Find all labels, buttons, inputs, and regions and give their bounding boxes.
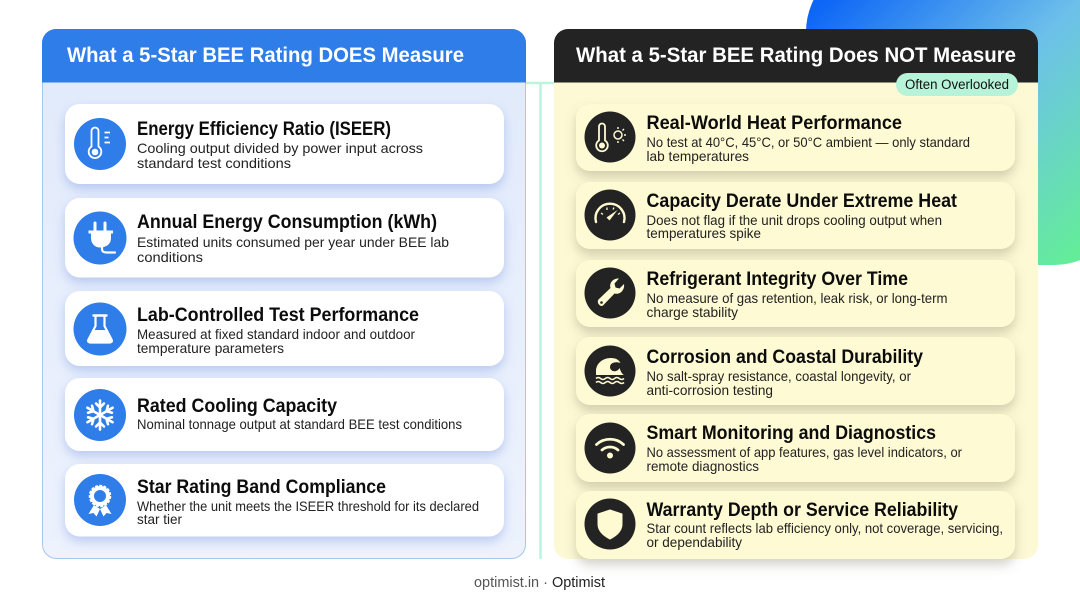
decorative gradient blob [806,0,1080,265]
card: warranty depth or service reliability [576,491,1015,559]
icon: wifi signal [584,422,636,474]
description: charge stability [646,305,738,320]
description: No salt-spray resistance, coastal longevity, or [646,369,911,384]
description: standard test conditions [137,156,291,171]
description: conditions [137,250,203,265]
icon: thermometer and sun [584,112,636,162]
description: temperatures spike [646,226,761,241]
icon: award rosette [74,474,126,526]
footer source line: optimist.in · Optimist [474,575,605,591]
description: No test at 40°C, 45°C, or 50°C ambient — only standard [646,135,970,150]
description: No assessment of app features, gas level indicators, or [646,445,962,460]
card: capacity derate under extreme heat [576,182,1015,249]
description [137,235,449,265]
icon: flask [74,302,126,356]
badge: often overlooked: Often Overlooked [905,77,1009,92]
panel header [554,29,1038,82]
description [137,327,415,356]
title: Energy Efficiency Ratio (ISEER) [137,118,391,140]
description [646,445,962,474]
panel header: What a 5-Star BEE Rating Does NOT Measure [576,43,1016,67]
connector line between panels [526,83,554,559]
description: star tier [137,512,182,527]
title: Star Rating Band Compliance [137,476,386,498]
description: temperature parameters [137,341,284,356]
title: Warranty Depth or Service Reliability [646,499,958,521]
description: Measured at fixed standard indoor and outdoor [137,327,415,342]
card: energy efficiency ratio [65,104,504,184]
title: Refrigerant Integrity Over Time [646,268,908,290]
title: Corrosion and Coastal Durability [646,346,923,368]
icon: shield [584,498,636,550]
description [646,213,942,241]
description: Cooling output divided by power input across [137,141,423,156]
description: or dependability [646,535,742,550]
description: remote diagnostics [646,459,759,474]
card: refrigerant integrity over time [576,260,1015,327]
title: Real-World Heat Performance [646,112,902,134]
title: Smart Monitoring and Diagnostics [646,422,936,444]
description: Estimated units consumed per year under BEE lab [137,235,449,250]
description [646,369,911,398]
description: lab temperatures [646,149,749,164]
description: No measure of gas retention, leak risk, or long-term [646,291,948,306]
card: star rating band compliance [65,464,504,536]
panel header [42,29,526,82]
title: Rated Cooling Capacity [137,395,337,417]
description [137,141,423,171]
card: real-world heat performance [576,104,1015,171]
panel header: What a 5-Star BEE Rating DOES Measure [67,43,464,67]
badge: often overlooked [896,73,1018,96]
description: Does not flag if the unit drops cooling output when [646,213,942,228]
description [137,499,479,527]
icon: snowflake [74,389,126,441]
icon: speedometer gauge [584,190,636,240]
card: lab-controlled test performance [65,291,504,366]
title: Lab-Controlled Test Performance [137,304,419,326]
description: Star count reflects lab efficiency only, not coverage, servicing, [646,521,1003,536]
title: Annual Energy Consumption (kWh) [137,211,437,233]
description: Nominal tonnage output at standard BEE test conditions [137,417,462,432]
card: annual energy consumption [65,198,504,278]
panel: what the rating does not measure [554,29,1038,559]
icon: wrench [584,268,636,318]
card: smart monitoring and diagnostics [576,414,1015,482]
description [646,521,1003,550]
description: anti-corrosion testing [646,383,773,398]
description [646,291,948,320]
description: Whether the unit meets the ISEER threshold for its declared [137,499,479,514]
icon: ocean wave [584,346,636,396]
title: Capacity Derate Under Extreme Heat [646,190,957,212]
card: rated cooling capacity [65,378,504,451]
card: corrosion and coastal durability [576,337,1015,405]
panel: what the rating measures [42,29,526,558]
icon: plug [74,212,126,264]
panel background [42,30,526,558]
description [646,135,970,164]
icon: thermometer [74,118,126,170]
panel background [554,29,1038,559]
